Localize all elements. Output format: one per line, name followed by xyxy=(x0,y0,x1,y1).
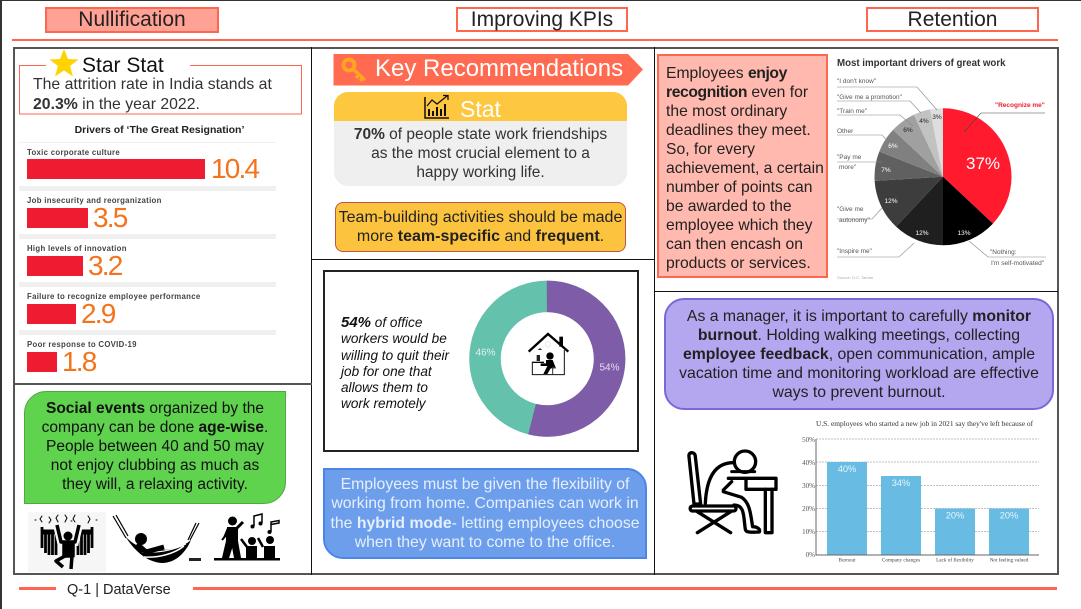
callout: flexibility: working from home. Companies can work in xyxy=(331,495,639,512)
bars xyxy=(827,462,1029,555)
stat title: Stat xyxy=(460,96,501,122)
gridlines xyxy=(816,439,1039,532)
callout: recognition: be awarded to the xyxy=(666,198,792,214)
chart: pie drivers of great work: 6% xyxy=(888,143,898,150)
bar values: 34% xyxy=(892,478,910,488)
star stat text: 20.3% in the year 2022. xyxy=(33,96,200,113)
stat text xyxy=(354,126,607,181)
remote work text: work remotely xyxy=(341,396,426,411)
pie labels: "Inspire me" xyxy=(837,248,873,255)
chart: donut xyxy=(469,280,626,437)
pie labels xyxy=(837,78,1045,280)
callout: social events: Social events organized by the xyxy=(46,400,264,416)
callout: team building xyxy=(335,202,626,252)
chart: donut: 46% xyxy=(475,348,496,358)
y axis labels: 50% xyxy=(802,436,815,444)
icon: burnt out worker at desk xyxy=(687,449,778,534)
star stat text xyxy=(33,76,272,113)
callout: recognition: achievement, a certain xyxy=(666,160,824,176)
callout: recognition: can then encash on xyxy=(666,236,803,252)
y axis labels: 30% xyxy=(802,482,815,490)
remote work text: allows them to xyxy=(341,380,428,395)
callout: burnout: employee feedback, open communication, ample xyxy=(683,346,1035,363)
callout: team building: Team-building activities should be made xyxy=(339,209,622,226)
panel: remote work donut xyxy=(323,270,639,452)
callout: flexibility xyxy=(323,468,647,559)
heading: Retention xyxy=(866,7,1039,32)
callout: burnout xyxy=(664,298,1054,410)
panel: star stat xyxy=(19,49,302,114)
chart: reasons for leaving bar chart xyxy=(802,419,1039,564)
callout: flexibility: when they want to come to the office. xyxy=(355,534,615,551)
bar values: 20% xyxy=(946,510,964,520)
callout: recognition: recognition even for xyxy=(666,84,808,100)
stat header xyxy=(334,92,627,121)
pie labels: autonomy" xyxy=(839,217,871,224)
row: failure to recognize: Failure to recognize employee performance xyxy=(27,292,200,301)
pie leader lines xyxy=(837,87,1046,257)
pie labels: "Nothing: xyxy=(990,249,1017,256)
chart: pie drivers of great work: 7% xyxy=(881,167,891,174)
pie values: 37% xyxy=(966,154,1000,173)
icon: party crowd xyxy=(28,512,106,572)
row: innovation: High levels of innovation xyxy=(27,244,127,253)
stat text: happy working life. xyxy=(416,164,545,181)
icon: singer and audience xyxy=(214,513,280,560)
banner: key recommendations xyxy=(334,54,643,86)
callout: burnout: ways to prevent burnout. xyxy=(772,384,946,401)
pie labels: "Recognize me" xyxy=(995,102,1045,109)
y axis labels: 40% xyxy=(802,459,815,467)
banner text: Key Recommendations xyxy=(375,55,623,82)
pie labels: "I don't know" xyxy=(837,78,877,85)
remote work text: 54% of office xyxy=(341,314,422,331)
y axis labels xyxy=(802,436,815,559)
y axis labels: 10% xyxy=(802,528,815,536)
callout: social events: company can be done age-wise. xyxy=(42,418,268,436)
footer text: Q-1 | DataVerse xyxy=(67,582,171,598)
row: job insecurity: Job insecurity and reorganization xyxy=(27,196,162,205)
callout: recognition: So, for every xyxy=(666,140,755,158)
star stat outline xyxy=(19,65,302,114)
chart: pie drivers of great work: 12% xyxy=(915,230,929,237)
star stat text: The attrition rate in India stands at xyxy=(33,76,272,93)
chart: pie drivers of great work xyxy=(837,58,1046,280)
row: toxic corporate culture: Toxic corporate culture xyxy=(27,148,120,156)
y axis labels: 0% xyxy=(806,551,815,559)
x axis labels: Burnout xyxy=(838,558,856,564)
icon: star xyxy=(50,49,78,76)
star stat title: Star Stat xyxy=(82,54,164,77)
stat text: as the most crucial element to a xyxy=(371,145,590,162)
heading: Nullification xyxy=(45,7,219,33)
pie labels: I'm self-motivated" xyxy=(991,260,1045,267)
icon: key xyxy=(342,58,366,82)
banner shape xyxy=(334,54,643,86)
callout: social events xyxy=(24,391,286,504)
chart: pie drivers of great work: 13% xyxy=(957,230,971,237)
bar values xyxy=(838,464,1018,520)
callout: recognition: number of points can xyxy=(666,178,813,196)
callout: social events: they will, a relaxing activity. xyxy=(62,476,248,492)
callout: recognition: the most ordinary xyxy=(666,102,787,120)
callout: recognition xyxy=(657,54,828,278)
footer xyxy=(19,582,1057,598)
pie labels: "Give me a promotion" xyxy=(837,94,903,101)
icon: working from home xyxy=(528,332,569,376)
callout: flexibility: Employees must be given the flexibility of xyxy=(341,476,629,493)
chart: pie drivers of great work: 12% xyxy=(884,198,898,205)
text: 1.8 xyxy=(62,346,96,376)
callout: social events: not enjoy clubbing as much as xyxy=(51,456,259,474)
bar chart title: U.S. employees who started a new job in 2021 say they've left because of xyxy=(816,419,1034,428)
pie labels: more" xyxy=(839,164,857,171)
icon: chart growth xyxy=(424,94,449,119)
remote work text: workers would be xyxy=(341,331,447,346)
pie labels: Source: O.C. Tanner xyxy=(837,275,874,280)
bar values: 40% xyxy=(838,464,856,474)
chart: pie drivers of great work: 6% xyxy=(903,127,913,134)
callout: recognition: Employees enjoy xyxy=(666,64,787,82)
panel: stat xyxy=(334,92,627,186)
pie slices xyxy=(909,142,977,211)
chart: pie drivers of great work: 4% xyxy=(919,118,929,125)
stat text: 70% of people state work friendships xyxy=(354,126,607,143)
pie labels: "Train me" xyxy=(837,108,868,115)
x axis labels: Not feeling valued xyxy=(990,556,1029,564)
text: 2.9 xyxy=(81,298,115,328)
remote work text: job for one that xyxy=(341,364,432,379)
chart title: Drivers of ‘The Great Resignation’ xyxy=(75,124,244,136)
callout: burnout: burnout. Holding walking meetings, collecting xyxy=(698,327,1020,344)
x axis labels: Lack of flexibility xyxy=(936,556,974,564)
icon: hammock xyxy=(112,514,201,563)
chart: donut: 54% xyxy=(599,362,620,374)
x axis labels xyxy=(838,556,1029,564)
pie title: Most important drivers of great work xyxy=(837,58,1006,69)
text: 3.5 xyxy=(93,202,127,232)
row: poor response: Poor response to COVID-19 xyxy=(27,340,137,349)
pie labels: "Pay me xyxy=(837,154,862,161)
bar values: 20% xyxy=(1000,510,1018,520)
callout: social events: People between 40 and 50 may xyxy=(46,438,264,454)
remote work text: willing to quit their xyxy=(341,348,449,363)
x axis labels: Company changes xyxy=(882,558,920,564)
callout: recognition: products or services. xyxy=(666,254,811,272)
heading: Retention: Retention xyxy=(908,8,997,31)
heading: Improving KPIs: Improving KPIs xyxy=(471,8,613,31)
remote work text xyxy=(340,314,450,411)
text: 3.2 xyxy=(88,250,122,280)
axes xyxy=(816,439,1039,555)
callout: burnout: vacation time and monitoring workload are effective xyxy=(679,365,1039,382)
pie labels: "Give me xyxy=(837,206,864,213)
callout: flexibility: the hybrid mode- letting employees choose xyxy=(330,515,640,532)
callout: recognition: employee which they xyxy=(666,216,812,234)
text: 10.4 xyxy=(211,153,258,184)
callout: burnout: As a manager, it is important to carefully monitor xyxy=(687,308,1031,325)
y axis labels: 20% xyxy=(802,505,815,513)
heading: Nullification: Nullification xyxy=(78,8,186,31)
chart: pie drivers of great work: 3% xyxy=(932,114,942,121)
callout: recognition: deadlines they meet. xyxy=(666,122,811,138)
pie labels: Other xyxy=(837,128,854,135)
callout: team building: more team-specific and frequent. xyxy=(357,228,604,245)
